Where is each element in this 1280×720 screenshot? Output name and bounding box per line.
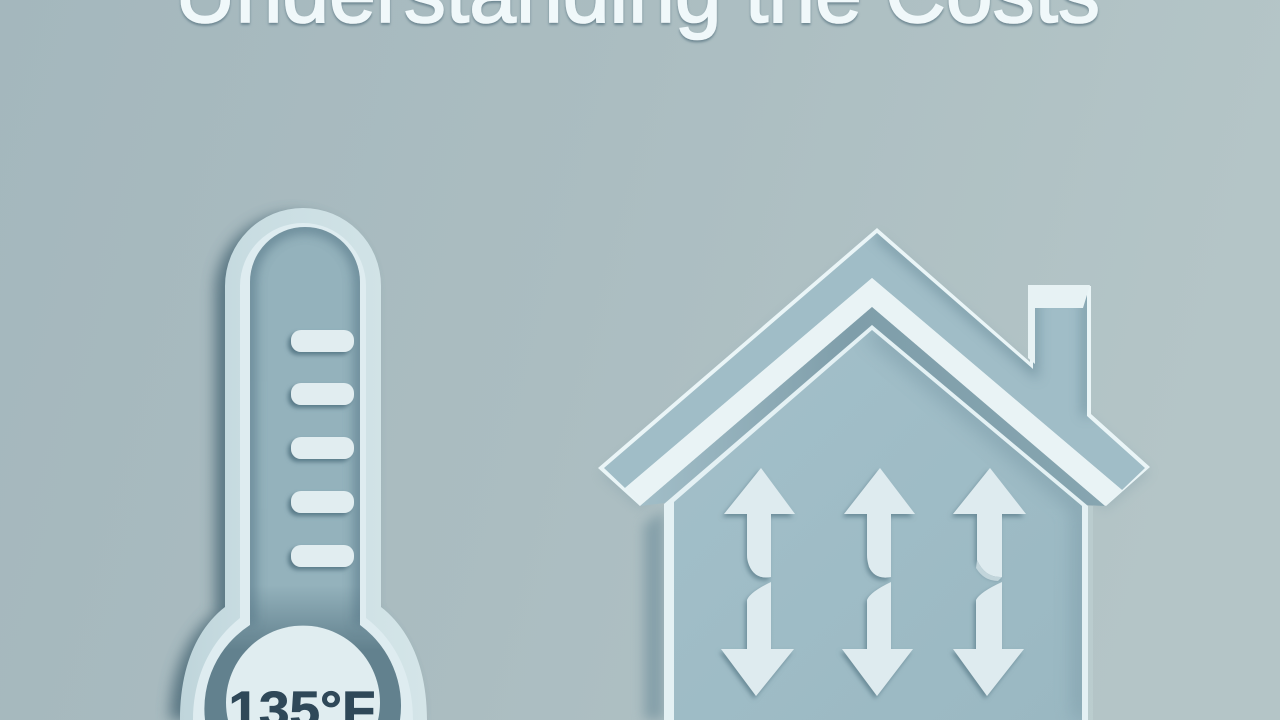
arrow 1 up xyxy=(724,468,795,578)
arrow 3 notch bevel xyxy=(976,560,1002,581)
roof recessed panel xyxy=(604,233,1145,490)
arrow 1 down xyxy=(721,582,794,696)
tick mark 2 xyxy=(291,383,354,405)
thermometer channel xyxy=(204,227,401,720)
tick mark 3 xyxy=(291,437,354,459)
arrow 3 up xyxy=(953,468,1026,577)
house wall shadow xyxy=(644,510,664,720)
gap under band xyxy=(640,307,1105,506)
thermometer cast shadow xyxy=(170,214,417,720)
icon: house xyxy=(598,228,1150,720)
thermometer shell inner bevel xyxy=(193,223,413,720)
thermometer bulb disc xyxy=(226,626,380,720)
arrow 2 down xyxy=(842,582,913,696)
arrow 2 up xyxy=(844,468,915,578)
chimney cap xyxy=(1028,285,1090,364)
arrow 3 down xyxy=(953,582,1024,696)
wall inner shadow xyxy=(872,330,1082,720)
thermometer outer shell xyxy=(180,208,427,720)
roof panel inner shadow xyxy=(877,233,1087,416)
roof and chimney outline xyxy=(598,228,1150,506)
right wall light strip xyxy=(1088,506,1093,720)
house wall outline xyxy=(664,325,1088,720)
house wall panel xyxy=(674,330,1082,720)
thermometer channel inner shadow xyxy=(250,227,360,625)
icon: thermometer xyxy=(170,208,427,720)
roof white band xyxy=(625,278,1122,506)
house roof cast shadow xyxy=(600,234,1150,510)
tick mark 5 xyxy=(291,545,354,567)
tick mark 1 xyxy=(291,330,354,352)
tick mark 4 xyxy=(291,491,354,513)
